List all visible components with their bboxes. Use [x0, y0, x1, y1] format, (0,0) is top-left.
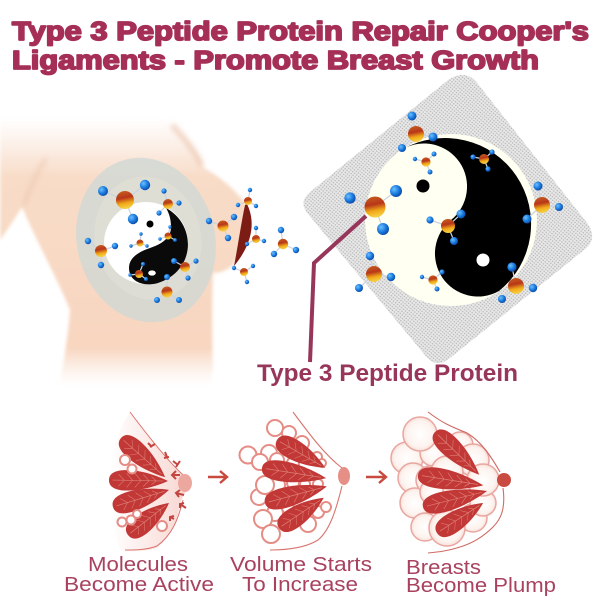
molecule — [271, 227, 299, 257]
arrow — [366, 471, 386, 483]
nipple section — [234, 204, 252, 266]
breast outline — [428, 412, 504, 553]
molecule — [236, 188, 258, 208]
torso — [0, 100, 247, 395]
nipple — [497, 473, 511, 487]
title — [12, 18, 589, 75]
molecule — [498, 262, 537, 303]
caption: volume starts to increase — [230, 554, 372, 596]
arrow — [208, 471, 227, 483]
molecule — [129, 232, 149, 248]
lobes — [260, 431, 330, 536]
molecule — [420, 269, 445, 292]
breast outline — [270, 412, 342, 550]
diagram: volume starts to increase — [240, 412, 350, 550]
molecule — [245, 226, 266, 246]
molecule — [128, 262, 148, 281]
leader line — [310, 216, 366, 362]
patch rings — [59, 143, 233, 337]
caption: molecules become active: Molecules — [88, 554, 188, 576]
fat cells — [391, 417, 499, 546]
shoulder crease — [172, 125, 202, 166]
lobes — [416, 425, 490, 542]
woven patch — [303, 75, 592, 363]
caption: molecules become active: Become Active — [64, 574, 214, 596]
molecule — [413, 152, 436, 174]
molecule — [426, 210, 466, 245]
torso illustration with applied patch — [0, 100, 299, 395]
molecule — [154, 274, 182, 303]
caption: breasts become plump — [406, 557, 556, 597]
molecule — [206, 214, 237, 241]
nipple — [338, 467, 350, 485]
large molecule — [344, 185, 402, 235]
molecule — [156, 188, 182, 216]
inward arrows — [148, 443, 186, 521]
yin yang — [365, 134, 537, 306]
molecules on patch — [310, 112, 563, 362]
molecule — [470, 149, 495, 172]
caption: breasts become plump: Breasts — [406, 557, 481, 579]
fat cells — [118, 455, 167, 531]
fat cells — [240, 420, 331, 543]
molecule — [158, 225, 177, 242]
molecule — [398, 112, 438, 152]
caption: breasts become plump: Become Plump — [406, 575, 556, 597]
molecule — [171, 258, 199, 281]
title: Type 3 Peptide Protein Repair Cooper's — [12, 18, 589, 46]
breast outline — [110, 412, 190, 551]
lobes — [109, 430, 175, 543]
diagram: breasts become plump — [391, 412, 511, 553]
molecules on torso — [85, 180, 299, 303]
armpit crease — [24, 158, 46, 206]
callout label: Type 3 Peptide Protein — [257, 360, 518, 387]
molecule — [85, 238, 118, 268]
molecule — [522, 182, 563, 224]
caption: volume starts to increase: To Increase — [242, 574, 358, 596]
title: Ligaments - Promote Breast Growth — [12, 47, 539, 75]
yin yang on torso — [104, 202, 188, 284]
patch with yin yang — [303, 75, 592, 363]
caption: volume starts to increase: Volume Starts — [230, 554, 372, 576]
nipple — [178, 474, 192, 492]
diagram: molecules become active — [109, 412, 192, 551]
molecule — [98, 180, 150, 224]
molecule — [355, 252, 395, 292]
molecule — [232, 264, 255, 284]
caption: molecules become active — [64, 554, 214, 596]
